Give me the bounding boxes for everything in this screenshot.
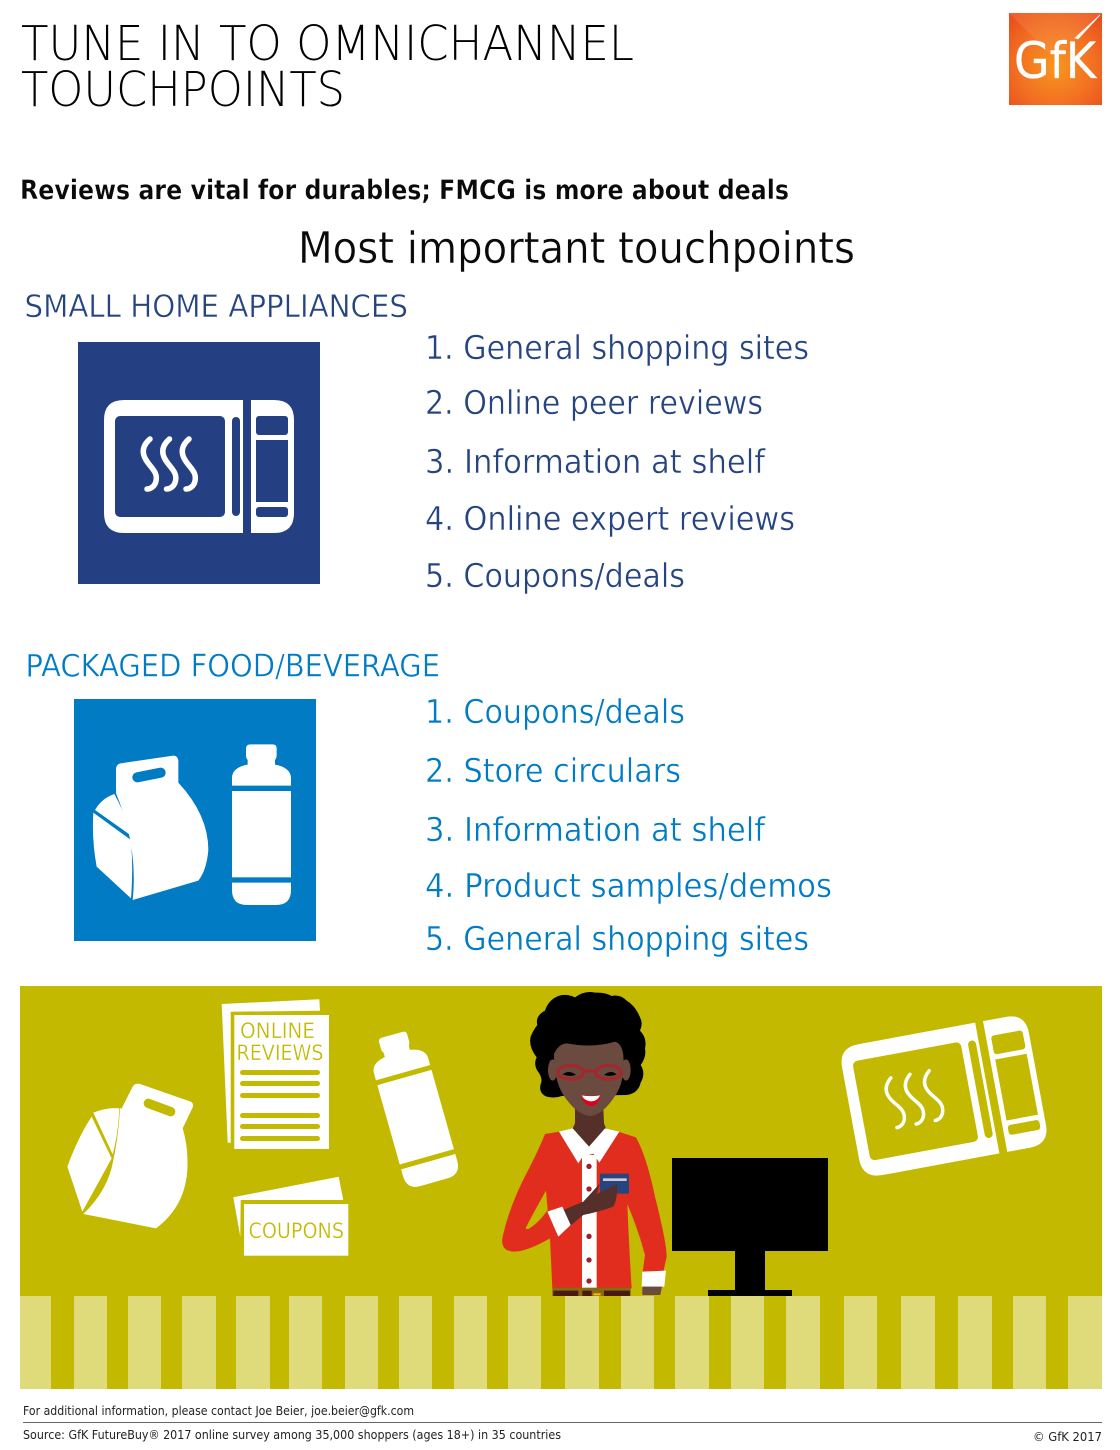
subheading: Reviews are vital for durables; FMCG is more about deals [20, 175, 789, 206]
icon: online reviews document: ONLINE [240, 1019, 315, 1043]
icon: food and bottle tile [74, 699, 316, 941]
panel: shopper scene [20, 986, 1102, 1389]
list: small home appliances: 4. Online expert reviews [425, 499, 795, 538]
illustration: checkout monitor [672, 1158, 828, 1296]
list: packaged food/beverage: 4. Product samples/demos [425, 866, 832, 905]
icon: microwave tile [78, 342, 320, 584]
list: packaged food/beverage: 5. General shopping sites [425, 919, 809, 958]
footer: copyright: © GfK 2017 [1033, 1430, 1102, 1444]
counter stripes [20, 1296, 1102, 1389]
icon: online reviews document [222, 999, 329, 1149]
icon: coupons: COUPONS [248, 1219, 344, 1243]
title [21, 16, 634, 118]
title: TUNE IN TO OMNICHANNEL [21, 16, 634, 72]
list: small home appliances: 1. General shopping sites [425, 328, 809, 367]
icon: tilted microwave [838, 1013, 1050, 1179]
logo: GfK: GfK [1014, 32, 1097, 90]
list: small home appliances: 2. Online peer reviews [425, 383, 763, 422]
logo: GfK [1009, 13, 1102, 105]
footer: source: Source: GfK FutureBuy® 2017 online survey among 35,000 shoppers (ages 18+) in 35 countries [23, 1428, 561, 1442]
illustration: shopper [502, 992, 667, 1296]
icon: bottle [365, 1027, 461, 1190]
list: packaged food/beverage [425, 692, 832, 958]
title: TOUCHPOINTS [21, 62, 345, 118]
heading: packaged food/beverage: PACKAGED FOOD/BEVERAGE [26, 648, 440, 684]
list: packaged food/beverage: 2. Store circulars [425, 751, 681, 790]
heading: most important touchpoints: Most important touchpoints [298, 223, 855, 274]
icon: food carton [67, 1084, 193, 1228]
icon: online reviews document: REVIEWS [236, 1041, 324, 1065]
list: small home appliances: 3. Information at shelf [425, 442, 766, 481]
list: small home appliances [425, 328, 809, 595]
list: packaged food/beverage: 3. Information at shelf [425, 810, 766, 849]
footer: contact: For additional information, please contact Joe Beier, joe.beier@gfk.com [23, 1404, 414, 1418]
icon: coupons [233, 1177, 348, 1256]
heading: small home appliances: SMALL HOME APPLIANCES [24, 289, 408, 325]
list: small home appliances: 5. Coupons/deals [425, 556, 685, 595]
list: packaged food/beverage: 1. Coupons/deals [425, 692, 685, 731]
